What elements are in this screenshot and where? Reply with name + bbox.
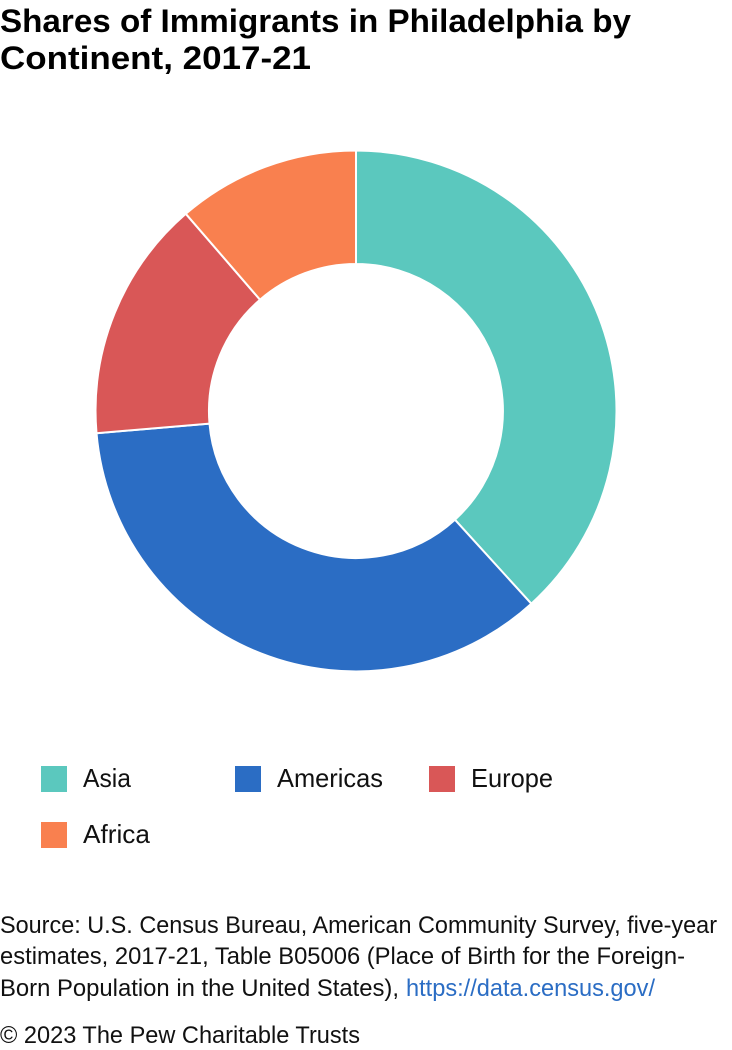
legend	[41, 763, 553, 849]
source note	[0, 912, 717, 1002]
title: Shares of Immigrants in Philadelphia by	[0, 3, 631, 39]
source note: Born Population in the United States),	[0, 975, 399, 1002]
legend item: Europe: Europe	[471, 763, 553, 793]
legend item: Americas: Americas	[277, 763, 383, 793]
donut chart	[96, 150, 617, 671]
title	[0, 3, 631, 76]
copyright: © 2023 The Pew Charitable Trusts	[0, 1022, 360, 1049]
source note: estimates, 2017-21, Table B05006 (Place of Birth for the Foreign-	[0, 943, 685, 970]
source note: Source: U.S. Census Bureau, American Community Survey, five-year	[0, 912, 717, 939]
segment: Asia	[356, 150, 617, 604]
segment: Americas	[96, 424, 531, 671]
title: Continent, 2017-21	[0, 40, 311, 76]
legend item: Asia	[41, 763, 132, 793]
legend item: Africa	[41, 819, 151, 849]
segment: Africa	[186, 150, 356, 300]
segment: Europe	[96, 214, 260, 433]
legend item: Africa: Africa	[83, 819, 151, 849]
source note: https://data.census.gov/	[406, 975, 655, 1002]
legend item: Asia: Asia	[83, 763, 132, 793]
legend item: Europe	[429, 763, 553, 793]
